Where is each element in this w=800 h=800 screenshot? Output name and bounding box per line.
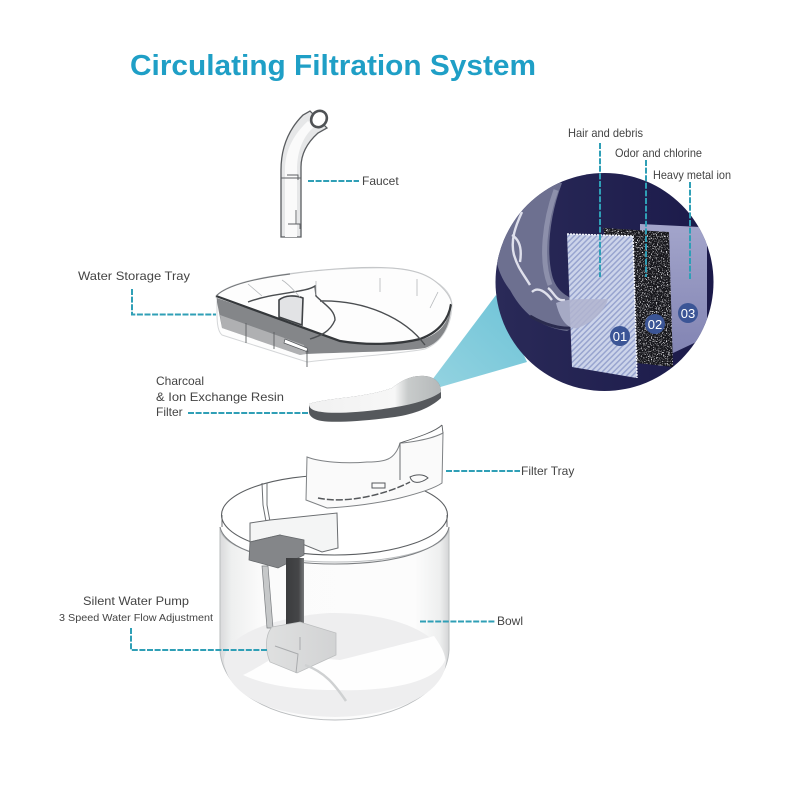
teal zoom cone	[423, 295, 527, 392]
badge 01	[610, 326, 630, 346]
label: water storage tray: Water Storage Tray	[78, 269, 190, 283]
sheet 01	[567, 234, 637, 378]
sheet 03	[640, 224, 707, 353]
dark pipe	[286, 558, 304, 628]
label: filter tray	[446, 464, 574, 478]
pump housing grey	[249, 535, 304, 568]
icon: charcoal filter	[309, 376, 441, 422]
bowl rim	[222, 475, 448, 555]
label: water storage tray	[78, 269, 216, 314]
label: charcoal filter: Charcoal	[156, 374, 204, 388]
title: Circulating Filtration System	[130, 50, 536, 82]
icon: bowl with pump	[220, 425, 449, 720]
faucet closeup	[497, 182, 570, 331]
badge 02	[645, 314, 665, 334]
label: hair and debris: Hair and debris	[568, 126, 643, 140]
label: silent water pump: 3 Speed Water Flow Adjustment	[59, 612, 213, 624]
label: silent water pump: Silent Water Pump	[83, 594, 189, 608]
faucet tip	[556, 299, 608, 328]
water floor	[224, 613, 446, 717]
badge 01: 01	[613, 329, 627, 344]
white floor	[243, 636, 445, 690]
circle background	[496, 173, 714, 391]
label: bowl	[420, 614, 523, 628]
icon: water storage tray	[216, 267, 452, 367]
label: charcoal filter: & Ion Exchange Resin	[156, 390, 284, 404]
pump	[266, 622, 336, 673]
sheet 01 dotted edge	[567, 234, 637, 378]
label: heavy metal ion: Heavy metal ion	[653, 168, 731, 182]
filter tray	[306, 425, 443, 508]
label: odor and chlorine: Odor and chlorine	[615, 146, 702, 160]
label: charcoal filter: Filter	[156, 405, 183, 419]
label: faucet	[308, 174, 399, 188]
label: bowl: Bowl	[497, 614, 523, 628]
badge 02: 02	[648, 317, 662, 332]
callout: filter layers magnified	[495, 173, 714, 391]
bowl body	[220, 527, 449, 720]
label: charcoal filter	[156, 374, 308, 419]
icon: faucet	[281, 108, 330, 237]
label: odor and chlorine	[615, 146, 702, 277]
label: filter tray: Filter Tray	[521, 464, 574, 478]
label: heavy metal ion	[653, 168, 731, 279]
power cable	[305, 665, 346, 701]
label: faucet: Faucet	[362, 174, 399, 188]
label: silent water pump	[59, 594, 267, 650]
sheet 02	[603, 228, 673, 367]
badge 03	[678, 303, 698, 323]
badge 03: 03	[681, 306, 695, 321]
pump housing clear	[250, 513, 338, 552]
intake tube	[262, 483, 273, 628]
